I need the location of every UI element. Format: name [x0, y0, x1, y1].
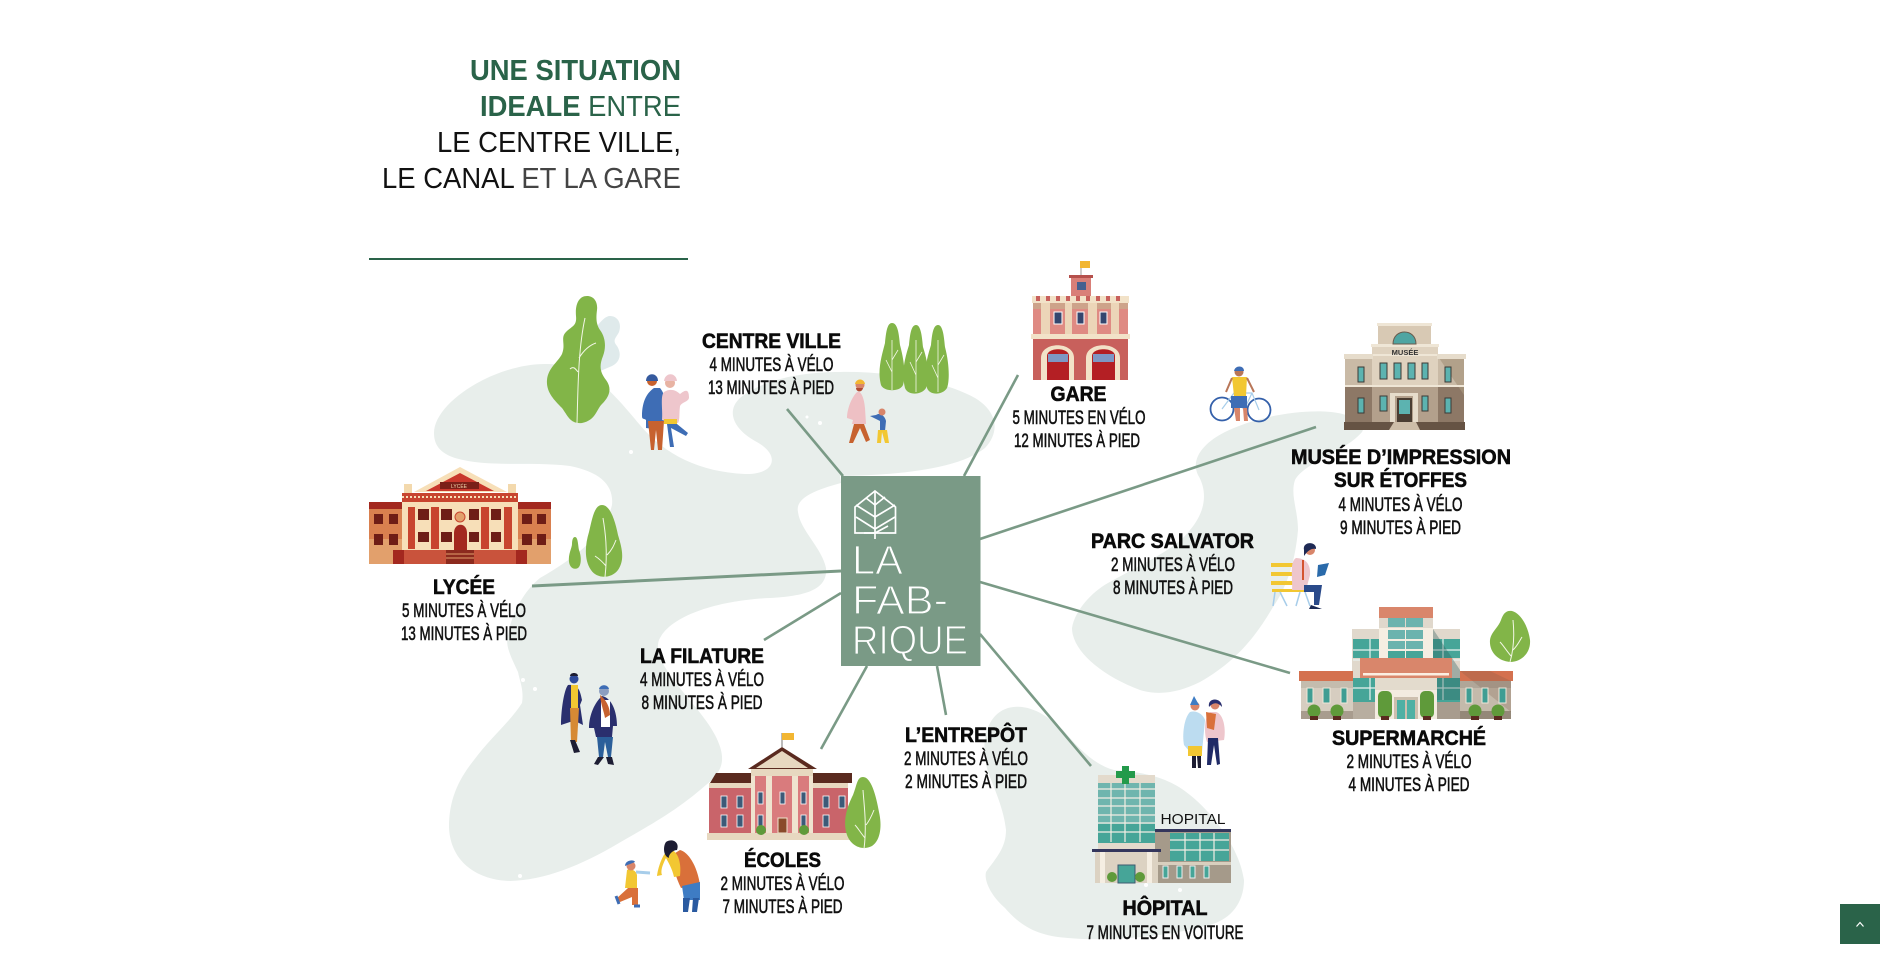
back to top button	[1840, 904, 1880, 944]
label: Hôpital: 7 MINUTES EN VOITURE	[1086, 922, 1244, 944]
building: Lycée: LYCÉE	[451, 483, 468, 490]
label: Musée: MUSÉE D’IMPRESSION	[1291, 446, 1511, 469]
label: Centre Ville: 13 MINUTES À PIED	[708, 376, 834, 399]
label: La Filature: 4 MINUTES À VÉLO	[640, 668, 764, 691]
label: Supermarché: 2 MINUTES À VÉLO	[1346, 750, 1472, 773]
label: Hôpital	[1086, 896, 1244, 944]
label: L'Entrepôt: L’ENTREPÔT	[905, 723, 1027, 747]
label: Gare: GARE	[1050, 383, 1106, 406]
logo panel: La Fabrique	[841, 476, 980, 666]
label: Parc Salvator: PARC SALVATOR	[1091, 530, 1254, 553]
label: Musée	[1291, 446, 1511, 539]
label: Musée: 4 MINUTES À VÉLO	[1338, 493, 1462, 516]
people: two women with camera	[1183, 696, 1225, 768]
tree group: three poplars	[880, 323, 949, 394]
label: Gare: 5 MINUTES EN VÉLO	[1012, 406, 1146, 429]
building: Musée	[1344, 323, 1466, 430]
logo panel: La Fabrique: FAB-	[852, 577, 948, 623]
label: Supermarché: 4 MINUTES À PIED	[1348, 773, 1470, 796]
icon: leaf	[855, 491, 896, 539]
people: mother bending to child	[616, 840, 700, 912]
tree: large top left	[547, 296, 609, 423]
people: mother and child	[847, 380, 889, 443]
label: Écoles	[720, 849, 844, 918]
title: LE CANAL ET LA GARE	[382, 163, 681, 195]
label: Hôpital: HÔPITAL	[1122, 896, 1208, 920]
label: Centre Ville	[702, 330, 841, 399]
label: La Filature: 8 MINUTES À PIED	[642, 691, 762, 714]
building: Lycée	[369, 467, 551, 564]
label: Lycée: 13 MINUTES À PIED	[401, 622, 527, 645]
label: Lycée: LYCÉE	[433, 576, 495, 599]
building: Musée: MUSÉE	[1392, 348, 1418, 357]
people: cyclist with bike	[1210, 366, 1270, 422]
label: Lycée: 5 MINUTES À VÉLO	[402, 599, 526, 622]
label: Parc Salvator: 8 MINUTES À PIED	[1113, 576, 1233, 599]
label: Gare: 12 MINUTES À PIED	[1014, 429, 1140, 452]
white snow dots	[518, 364, 1182, 892]
label: L'Entrepôt: 2 MINUTES À VÉLO	[904, 747, 1028, 770]
building: Gare	[1031, 261, 1130, 380]
logo panel: La Fabrique: RIQUE	[852, 617, 968, 663]
label: Gare	[1012, 383, 1146, 452]
label: Supermarché	[1332, 727, 1486, 796]
building: Supermarché	[1299, 607, 1513, 720]
label: Parc Salvator	[1091, 530, 1254, 599]
people: woman reading on bench	[1271, 543, 1329, 609]
tree group: lycée	[569, 505, 622, 577]
title: LE CENTRE VILLE,	[437, 127, 681, 159]
connector lines	[532, 375, 1316, 766]
label: Écoles: 7 MINUTES À PIED	[722, 895, 842, 918]
label: Supermarché: SUPERMARCHÉ	[1332, 727, 1486, 750]
label: La Filature	[640, 645, 764, 714]
background blobs	[434, 316, 1363, 939]
title: IDEALE ENTRE	[480, 91, 681, 123]
tree: supermarché	[1490, 611, 1530, 662]
people: couple	[642, 374, 689, 450]
label: Parc Salvator: 2 MINUTES À VÉLO	[1111, 553, 1235, 576]
label: Musée: 9 MINUTES À PIED	[1340, 516, 1461, 539]
building: Hôpital: HOPITAL	[1160, 812, 1226, 828]
title	[382, 55, 681, 195]
label: Lycée	[401, 576, 527, 645]
label: La Filature: LA FILATURE	[640, 645, 764, 668]
label: L'Entrepôt	[904, 723, 1028, 793]
label: Musée: SUR ÉTOFFES	[1334, 469, 1467, 492]
label: Écoles: 2 MINUTES À VÉLO	[720, 872, 844, 895]
building: Écoles	[707, 733, 881, 849]
people: two walkers	[561, 673, 617, 765]
label: Écoles: ÉCOLES	[744, 849, 821, 872]
title: UNE SITUATION	[470, 55, 681, 87]
label: Centre Ville: 4 MINUTES À VÉLO	[710, 353, 834, 376]
label: L'Entrepôt: 2 MINUTES À PIED	[905, 770, 1027, 793]
logo panel: La Fabrique: LA	[852, 537, 904, 583]
label: Centre Ville: CENTRE VILLE	[702, 330, 841, 353]
building: Hôpital	[1092, 766, 1231, 883]
